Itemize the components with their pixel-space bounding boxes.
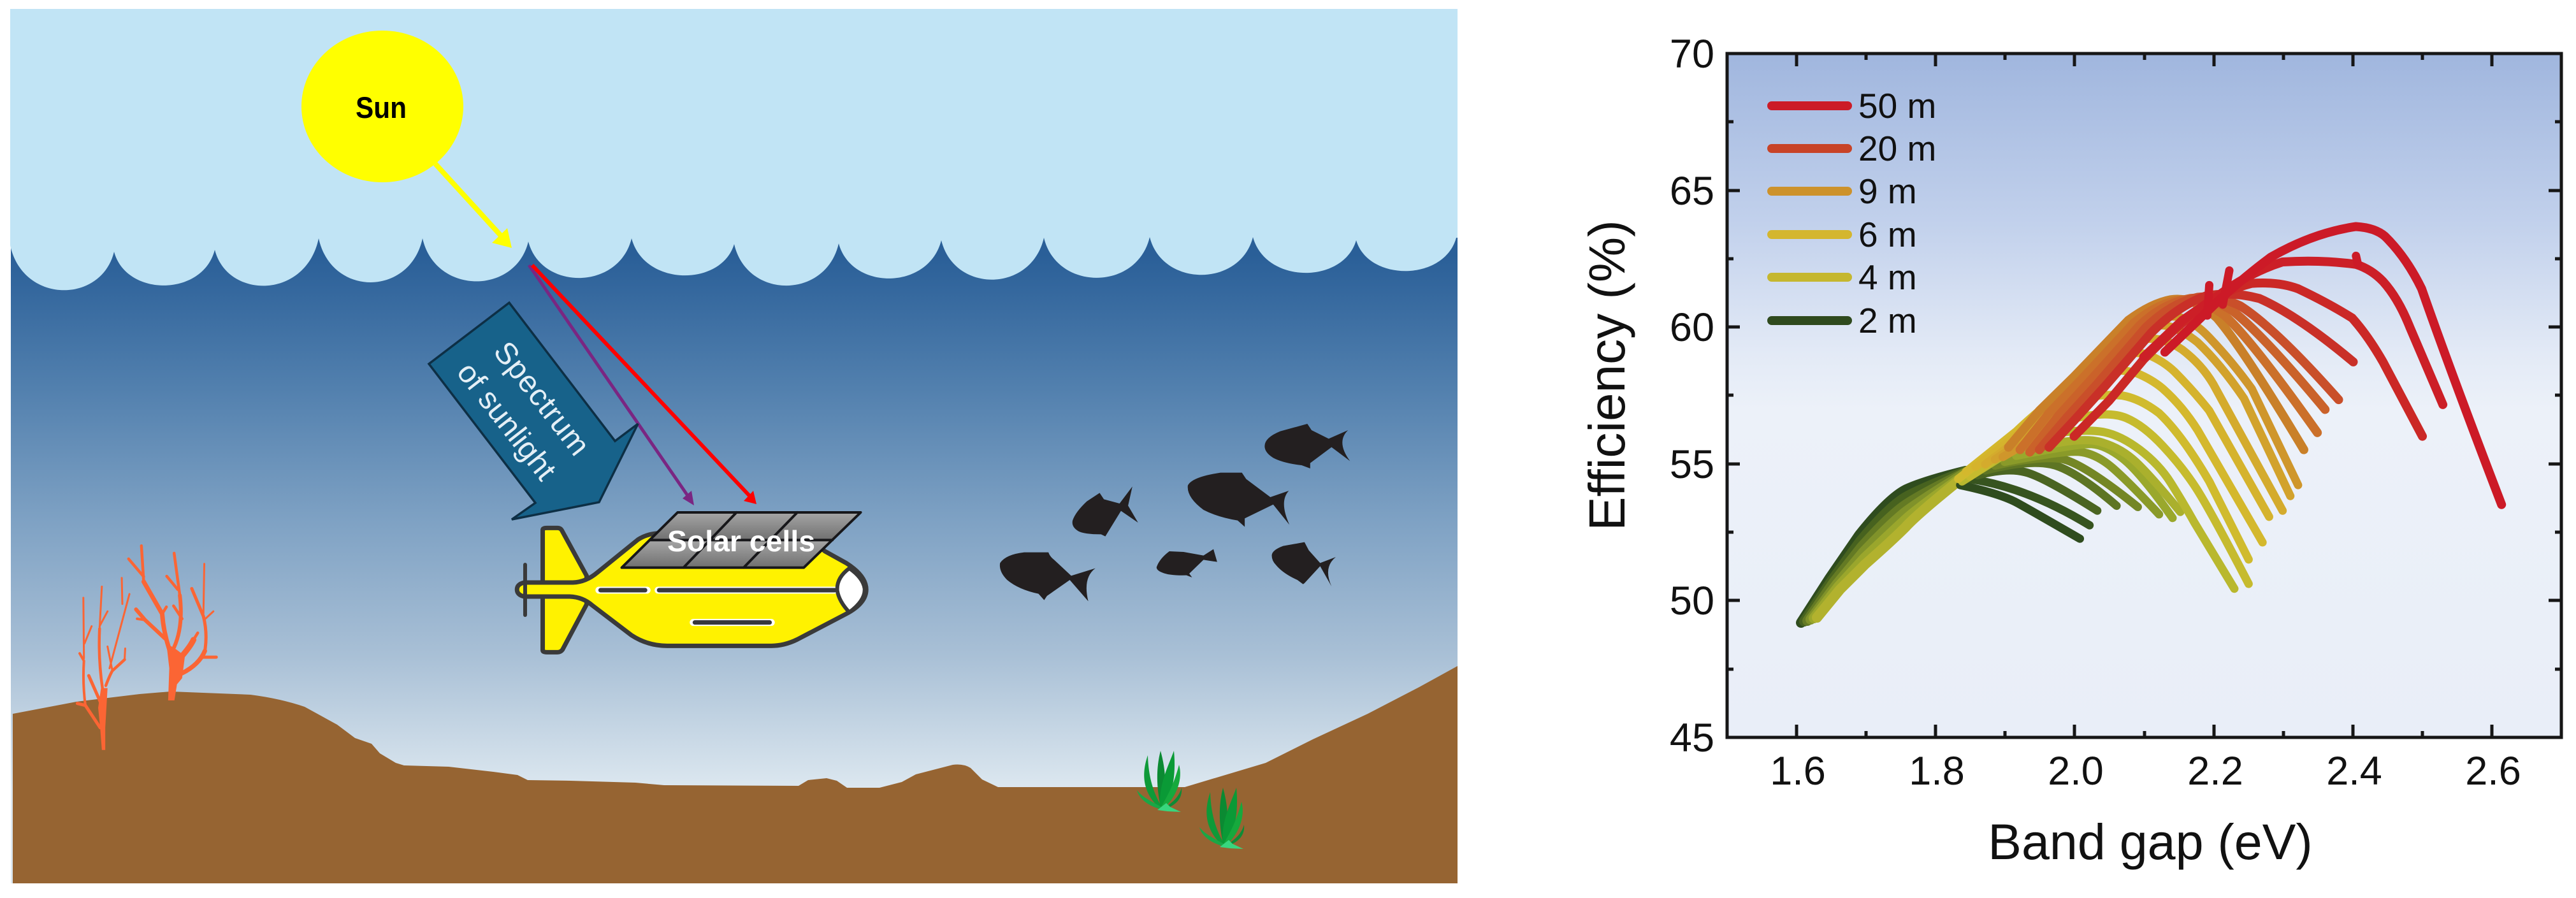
arrow text: Spectrum: [487, 335, 597, 462]
legend: [1772, 86, 1936, 340]
chart: efficiency vs band gap: [1579, 32, 2561, 870]
x axis labels: 2.0: [2048, 749, 2104, 793]
legend: 20 m: [1858, 129, 1936, 168]
y axis title: Efficiency (%): [1579, 220, 1635, 531]
legend: 2 m: [1858, 301, 1917, 340]
y axis labels: 45: [1670, 716, 1714, 760]
axis ticks: [1727, 54, 2561, 737]
legend: 6 m: [1858, 215, 1917, 254]
y axis labels: 55: [1670, 442, 1714, 487]
rising hump of shallow curves: [1801, 471, 1969, 623]
coral left: [77, 578, 129, 750]
icon: orange corals: [77, 546, 216, 750]
plot area: [1727, 54, 2561, 737]
panel: underwater scene: [10, 9, 1458, 883]
arrow: purple ray: [529, 265, 694, 505]
hull lines: [599, 590, 835, 623]
y axis labels: 70: [1670, 32, 1714, 76]
icon: seaweed plant one: [1137, 751, 1182, 812]
legend: 50 m: [1858, 86, 1936, 126]
vehicle hull: [517, 533, 866, 646]
curves: 2 m to 4 m depths: [1960, 440, 2180, 539]
seafloor: [13, 666, 1458, 883]
sun label: Sun: [356, 91, 407, 124]
x axis labels: 1.8: [1909, 749, 1965, 793]
y axis labels: [1670, 32, 1714, 760]
icon: yellow underwater vehicle: [517, 512, 866, 652]
icon: school of fish: [1000, 424, 1350, 601]
icon: seaweed plant two: [1199, 788, 1244, 849]
vehicle fins: [543, 528, 586, 652]
legend: 9 m: [1858, 171, 1917, 211]
y axis labels: 65: [1670, 169, 1714, 214]
camera lens: [837, 568, 865, 612]
arrow: spectrum of sunlight: [429, 303, 638, 519]
solar panel: [622, 512, 861, 568]
x axis labels: 2.4: [2326, 749, 2382, 793]
curves: 20 m to 50 m depths: [2008, 226, 2501, 505]
arrow text: [450, 335, 597, 487]
coral right: [129, 546, 216, 700]
y axis labels: 50: [1670, 579, 1714, 623]
arrow: red ray: [532, 265, 756, 504]
x axis labels: 1.6: [1770, 749, 1826, 793]
x axis labels: [1770, 749, 2521, 793]
water column: [11, 229, 1458, 883]
solar cells label: Solar cells: [667, 525, 815, 558]
legend: 4 m: [1858, 257, 1917, 297]
icon: sun: [301, 31, 463, 182]
x axis title: Band gap (eV): [1988, 813, 2313, 870]
x axis labels: 2.6: [2465, 749, 2521, 793]
y axis labels: 60: [1670, 305, 1714, 350]
sky with scalloped waves: [10, 9, 1458, 290]
curves: 6 m to 9 m depths: [1958, 316, 2298, 589]
x axis labels: 2.2: [2187, 749, 2243, 793]
arrow text: of sunlight: [450, 356, 563, 487]
propeller: [523, 565, 527, 615]
arrow: sunlight to surface: [435, 164, 512, 248]
